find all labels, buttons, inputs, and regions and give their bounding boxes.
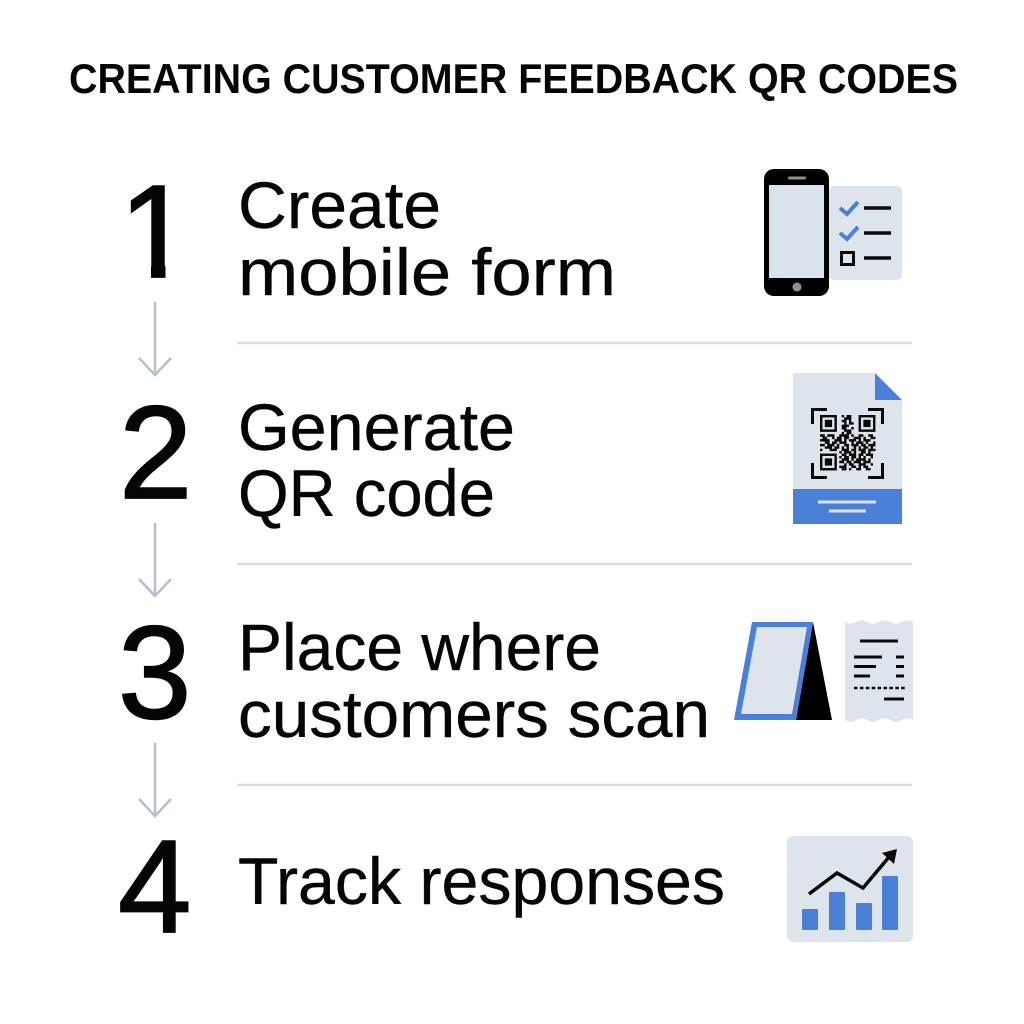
text: generate QR code: Generate — [238, 390, 515, 464]
icon: table tent — [734, 622, 832, 720]
panel: step 3 — [118, 599, 913, 751]
text: track responses: Track responses — [238, 844, 725, 918]
text: create mobile form — [238, 168, 616, 309]
number 2: 2 — [119, 379, 192, 526]
text: generate QR code: QR code — [238, 456, 495, 530]
number 4: 4 — [118, 813, 191, 960]
arrow: step 1 to 2 — [139, 302, 171, 375]
text: place where customers scan: Place where — [238, 610, 601, 684]
icon: receipt — [845, 620, 913, 722]
number 1: 1 — [119, 158, 192, 305]
text: generate QR code — [238, 390, 515, 530]
text: place where customers scan — [238, 610, 710, 751]
arrow: step 2 to 3 — [139, 523, 171, 596]
icon: document with QR code — [793, 373, 902, 524]
title: CREATING CUSTOMER FEEDBACK QR CODES — [69, 55, 958, 102]
panel: step 4 — [118, 813, 913, 960]
icon: growth chart — [787, 836, 913, 942]
text: create mobile form: Create — [238, 168, 441, 242]
icon: phone with checklist — [764, 169, 902, 296]
arrow: step 3 to 4 — [139, 743, 171, 816]
panel: step 1 — [130, 169, 902, 296]
text: place where customers scan: customers scan — [238, 677, 710, 751]
text: create mobile form: mobile form — [238, 235, 616, 309]
panel: step 2 — [119, 373, 902, 530]
number 3: 3 — [118, 599, 191, 746]
